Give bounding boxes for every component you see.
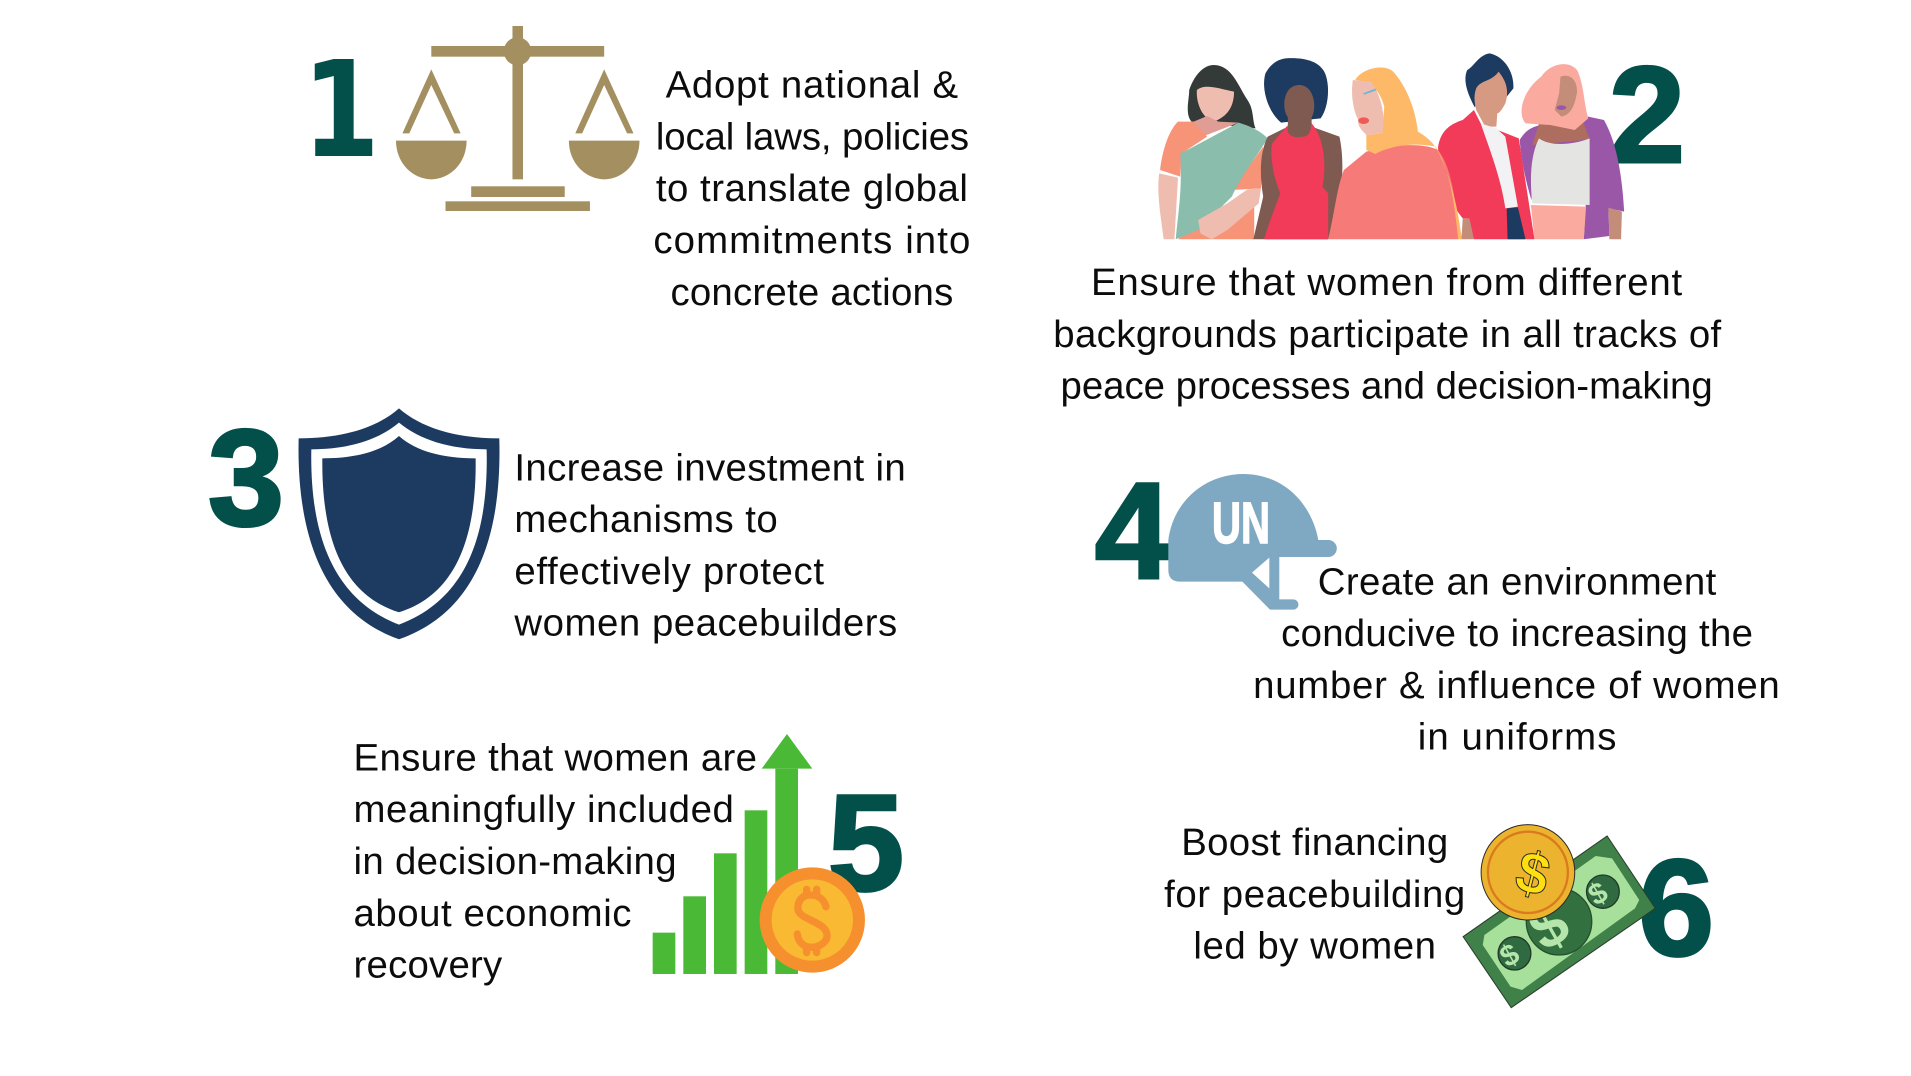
- woman in hijab: [1328, 68, 1462, 239]
- icon: banknote and coin: $: [1517, 887, 1580, 964]
- icon: banknote and coin: $: [1583, 875, 1614, 913]
- text: increase investment: mechanisms to: [514, 498, 778, 541]
- text: ensure women included: in decision-making: [354, 840, 677, 883]
- icon: UN helmet: [1168, 474, 1337, 610]
- number 2: 2: [1609, 39, 1685, 192]
- text: ensure women included: meaningfully included: [354, 788, 734, 831]
- text: create environment: [1253, 560, 1780, 759]
- icon: banknote and coin: $: [1509, 839, 1556, 910]
- icon: scales of justice: [396, 26, 639, 211]
- item 4: women in uniform: [1095, 455, 1780, 759]
- text: increase investment: Increase investment in: [514, 446, 906, 489]
- text: create environment: number & influence of women: [1253, 664, 1780, 707]
- item 3: protect peacebuilders: [208, 402, 906, 645]
- text: create environment: conducive to increasing the: [1281, 612, 1753, 655]
- text: adopt laws: to translate global: [656, 167, 968, 210]
- item 5: economic recovery: [354, 734, 904, 987]
- text: boost financing: for peacebuilding: [1164, 873, 1465, 916]
- item 2: women participate: [1053, 39, 1722, 408]
- text: ensure women included: about economic: [354, 892, 631, 935]
- text: increase investment: women peacebuilders: [513, 602, 897, 645]
- text: adopt laws: local laws, policies: [656, 115, 969, 158]
- text: create environment: Create an environment: [1318, 560, 1717, 603]
- text: women participate: Ensure that women from different: [1091, 261, 1683, 304]
- icon: shield: [299, 408, 499, 639]
- icon: banknote and coin: $: [1495, 937, 1525, 974]
- text: women participate: peace processes and decision-making: [1061, 365, 1713, 408]
- text: ensure women included: Ensure that women are: [354, 736, 757, 779]
- number 4: 4: [1095, 455, 1171, 608]
- text: women participate: [1053, 261, 1722, 408]
- number 3: 3: [208, 402, 284, 555]
- text: adopt laws: Adopt national &: [666, 64, 958, 107]
- text: women participate: backgrounds participate in all tracks of: [1053, 313, 1722, 356]
- icon: group of five women: [1158, 53, 1624, 239]
- text: create environment: in uniforms: [1418, 716, 1616, 759]
- text: ensure women included: recovery: [354, 944, 503, 987]
- woman in red jacket: [1438, 53, 1534, 239]
- woman in red halter dress: [1253, 58, 1342, 239]
- woman in sari: [1158, 65, 1268, 239]
- item 1: laws and policies: [302, 26, 970, 314]
- icon: banknote and coin: [1463, 825, 1655, 1008]
- text: boost financing: Boost financing: [1181, 821, 1448, 864]
- text: ensure women included: [354, 736, 757, 987]
- icon: UN helmet: UN: [1212, 491, 1270, 556]
- text: increase investment: [513, 446, 906, 645]
- woman with curly pink hair: [1520, 64, 1624, 239]
- item 6: financing: [1164, 821, 1714, 1008]
- number 6: 6: [1638, 832, 1714, 985]
- text: adopt laws: commitments into: [653, 219, 970, 262]
- text: boost financing: [1164, 821, 1465, 968]
- icon: rising bars with arrow and coin: [653, 734, 865, 974]
- text: boost financing: led by women: [1193, 925, 1436, 968]
- text: increase investment: effectively protect: [514, 550, 824, 593]
- text: adopt laws: concrete actions: [670, 271, 953, 314]
- number 5: 5: [828, 767, 904, 920]
- text: adopt laws: [653, 64, 970, 314]
- number 1: 1: [302, 33, 380, 187]
